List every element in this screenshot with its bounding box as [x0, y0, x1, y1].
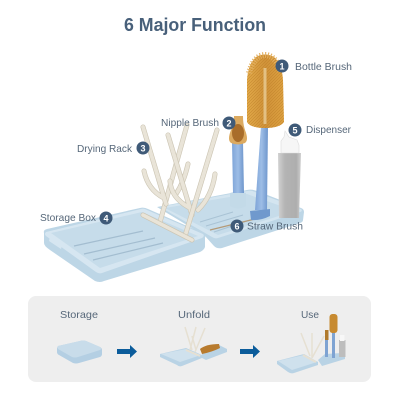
label: storage box: Storage Box: [40, 212, 97, 224]
panel: product illustration: [44, 54, 304, 282]
arrow: unfold to use: [240, 345, 260, 358]
label: nipple brush: Nipple Brush: [161, 117, 219, 129]
icon: unfolded tray: [160, 327, 227, 366]
drying rack: [143, 125, 217, 240]
panel: usage steps: [28, 296, 371, 382]
left tray: [44, 208, 205, 282]
icon: in-use product: [277, 314, 346, 373]
step label: unfold: Unfold: [178, 309, 210, 321]
label: nipple brush: 2: [226, 118, 232, 128]
label: dispenser: Dispenser: [306, 124, 351, 136]
label: dispenser: 5: [292, 126, 298, 136]
right tray: [157, 190, 304, 248]
label: drying rack: Drying Rack: [77, 143, 133, 155]
arrow: storage to unfold: [117, 345, 137, 358]
step label: use: Use: [301, 309, 319, 321]
bottle brush: [247, 54, 284, 220]
label: dispenser: [288, 124, 351, 136]
label: straw brush: 6: [234, 222, 240, 232]
label: bottle brush: 1: [279, 62, 285, 72]
label: bottle brush: [276, 60, 352, 73]
label: bottle brush: Bottle Brush: [295, 61, 352, 73]
title: 6 Major Function: [124, 15, 266, 35]
nipple brush: [229, 116, 247, 208]
step label: storage: Storage: [60, 309, 98, 321]
label: drying rack: 3: [140, 144, 146, 154]
dispenser: [278, 131, 301, 218]
icon: closed box: [57, 340, 102, 364]
label: straw brush: Straw Brush: [247, 220, 303, 232]
label: storage box: 4: [103, 214, 109, 224]
